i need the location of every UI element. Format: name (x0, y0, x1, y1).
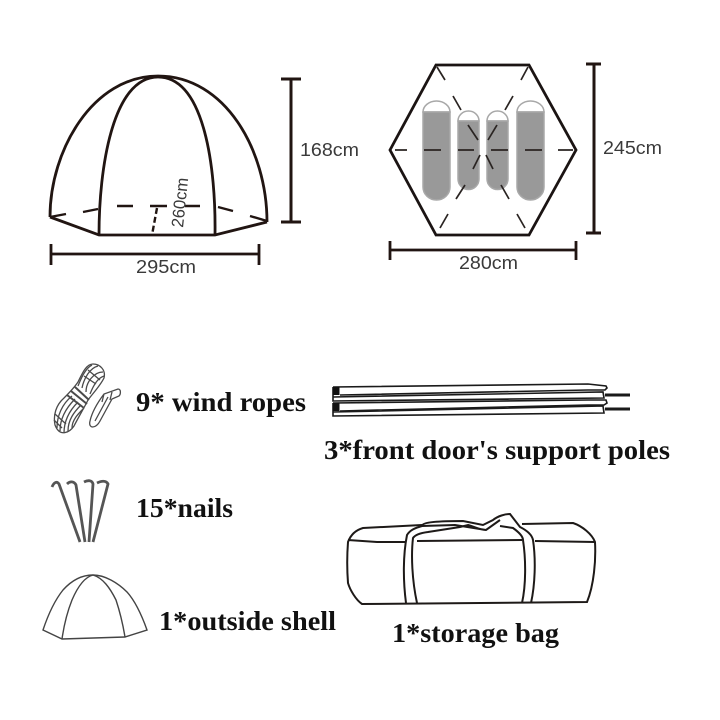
internal dashes (395, 67, 573, 228)
icon: support poles (333, 384, 630, 416)
side view tent diagram (50, 76, 301, 265)
height dimension 168cm (281, 79, 301, 222)
sleeping bags (423, 101, 544, 200)
hexagon outline (390, 65, 576, 235)
label 245cm: 245cm (603, 137, 662, 158)
icon: outside shell (43, 575, 147, 639)
label: storage bag: 1*storage bag (392, 618, 560, 648)
icon: nails (52, 481, 108, 542)
width dimension 280cm (390, 241, 576, 260)
label 168cm: 168cm (300, 139, 359, 160)
icon: wind ropes (54, 364, 120, 433)
label 295cm: 295cm (136, 256, 196, 277)
label: 9 wind ropes: 9* wind ropes (136, 387, 306, 417)
width dimension 295cm (51, 244, 259, 265)
label: support poles: 3*front door's support poles (324, 435, 670, 465)
tent floor dashes (50, 206, 267, 235)
floor plan diagram (390, 64, 601, 260)
icon: storage bag (347, 514, 595, 604)
label 280cm: 280cm (459, 252, 518, 273)
height dimension 245cm (586, 64, 601, 233)
label 260cm: 260cm (168, 177, 192, 228)
label: 15 nails: 15*nails (136, 493, 233, 523)
tent dome outline (50, 76, 267, 235)
label: 1 outside shell: 1*outside shell (159, 606, 337, 636)
